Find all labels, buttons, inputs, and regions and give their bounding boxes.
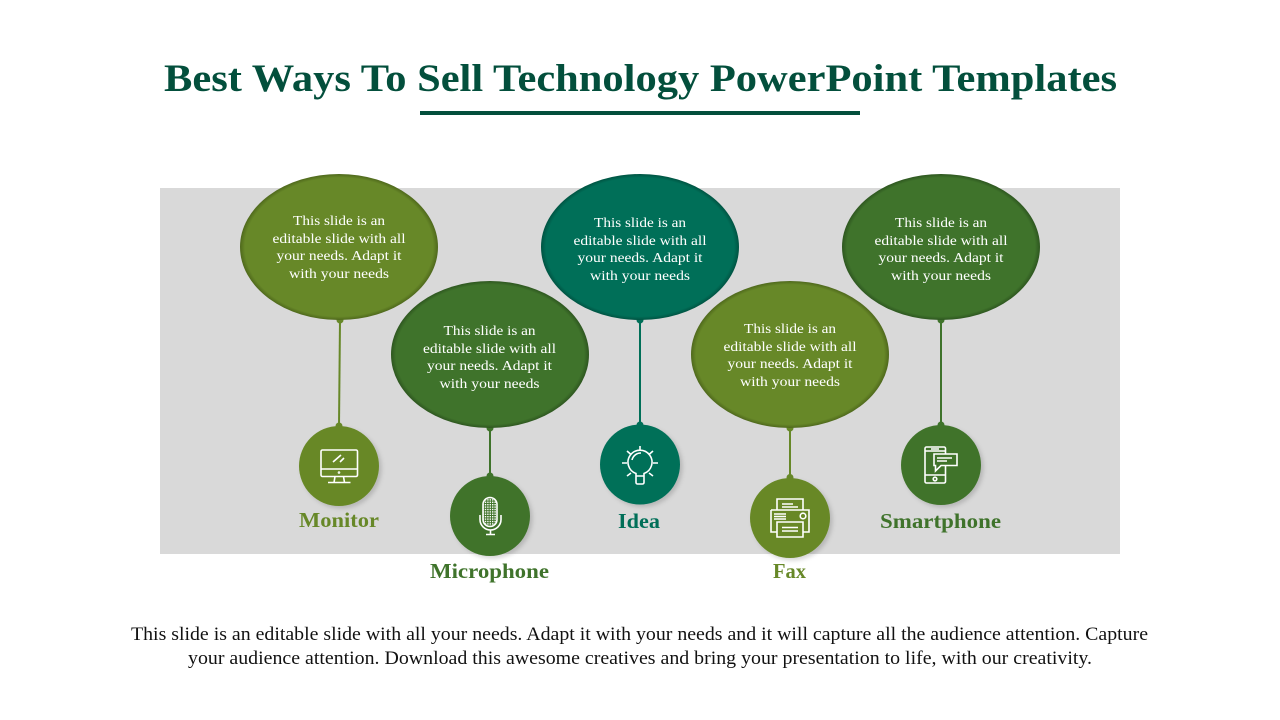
icon: light bulb	[622, 446, 658, 484]
title	[164, 57, 1117, 115]
background panel	[160, 188, 1120, 554]
bubble text: Smartphone: editable slide with all	[874, 234, 1008, 249]
icon: monitor	[321, 450, 358, 482]
connector: Microphone	[486, 424, 494, 480]
bubble text: Smartphone: This slide is an	[895, 216, 987, 231]
bubble text: Microphone: with your needs	[440, 377, 540, 392]
bubble text: Microphone: This slide is an	[444, 324, 536, 339]
label: Smartphone: Smartphone	[880, 509, 1001, 533]
bubble text: Microphone: editable slide with all	[423, 342, 556, 357]
bubble text: Idea: with your needs	[590, 269, 690, 284]
bubble: Fax	[691, 281, 889, 428]
item: Fax	[691, 281, 889, 583]
icon circle: Idea	[600, 424, 680, 504]
connector: Idea	[636, 316, 644, 428]
body text: This slide is an editable slide with all your needs. Adapt it with your needs and it will capture all the audience attention. Capture	[131, 624, 1148, 645]
bubble text: Fax: your needs. Adapt it	[728, 357, 853, 372]
bubble text: Idea: This slide is an	[594, 216, 686, 231]
bubble text: Monitor: This slide is an	[293, 214, 385, 229]
label: Monitor: Monitor	[299, 508, 379, 532]
icon: fax	[771, 499, 809, 537]
label: Idea: Idea	[618, 509, 660, 533]
bubble text: Smartphone: your needs. Adapt it	[878, 251, 1004, 266]
label: Microphone: Microphone	[430, 559, 549, 583]
icon circle: Monitor	[299, 426, 379, 506]
item: Monitor	[240, 174, 438, 532]
label: Fax: Fax	[773, 559, 806, 583]
icon circle: Microphone	[450, 476, 530, 556]
item: Idea	[541, 174, 739, 533]
bubble: Smartphone	[842, 174, 1040, 320]
connector: Fax	[786, 424, 794, 481]
title: Best Ways To Sell Technology PowerPoint Templates	[164, 57, 1117, 100]
bubble text: Monitor: your needs. Adapt it	[276, 249, 402, 264]
bubble text: Smartphone: with your needs	[891, 269, 991, 284]
bubble: Idea	[541, 174, 739, 320]
icon circle: Fax	[750, 478, 830, 558]
item: Microphone	[391, 281, 589, 583]
bubble: Microphone	[391, 281, 589, 428]
icon circle: Smartphone	[901, 425, 981, 505]
bubble text: Monitor: editable slide with all	[272, 232, 406, 247]
bubble text: Fax: This slide is an	[744, 322, 836, 337]
connector: Smartphone	[938, 316, 944, 428]
bubble: Monitor	[240, 174, 438, 320]
bubble text: Microphone: your needs. Adapt it	[427, 359, 552, 374]
bubble text: Fax: editable slide with all	[724, 340, 857, 355]
bubble text: Idea: your needs. Adapt it	[578, 251, 703, 266]
icon: microphone	[480, 498, 501, 534]
bubble text: Idea: editable slide with all	[574, 234, 707, 249]
icon: smartphone	[925, 447, 957, 483]
connector: Monitor	[336, 316, 344, 430]
bubble text: Monitor: with your needs	[289, 267, 389, 282]
body text: your audience attention. Download this awesome creatives and bring your presentation to life, with our creativity.	[188, 648, 1092, 669]
bubble text: Fax: with your needs	[740, 375, 840, 390]
item: Smartphone	[842, 174, 1040, 533]
